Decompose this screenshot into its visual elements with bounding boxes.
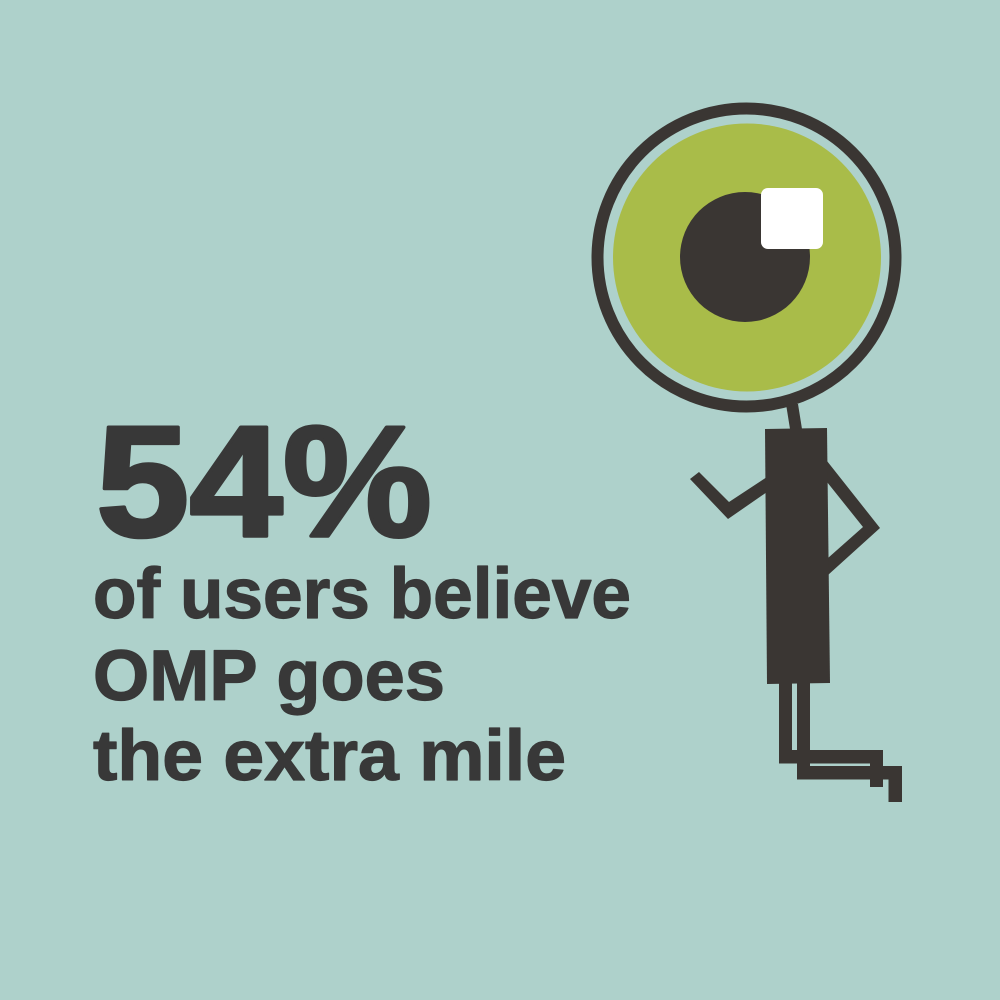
iris xyxy=(613,124,881,392)
pupil xyxy=(680,192,810,322)
left arm xyxy=(690,472,767,519)
line: of users believe: of users believe xyxy=(93,555,631,634)
text block: statement xyxy=(93,555,631,796)
icon: magnifying-glass figure with eye xyxy=(598,108,902,802)
front leg and foot xyxy=(797,683,902,802)
right arm xyxy=(827,461,880,575)
statistic: 54%: 54% xyxy=(96,394,432,570)
back leg and foot xyxy=(779,683,883,787)
eye highlight xyxy=(761,188,823,249)
line: the extra mile: the extra mile xyxy=(93,717,566,796)
handle neck xyxy=(786,404,802,429)
line: OMP goes: OMP goes xyxy=(93,637,445,716)
lens ring xyxy=(598,108,896,406)
body xyxy=(765,428,830,684)
